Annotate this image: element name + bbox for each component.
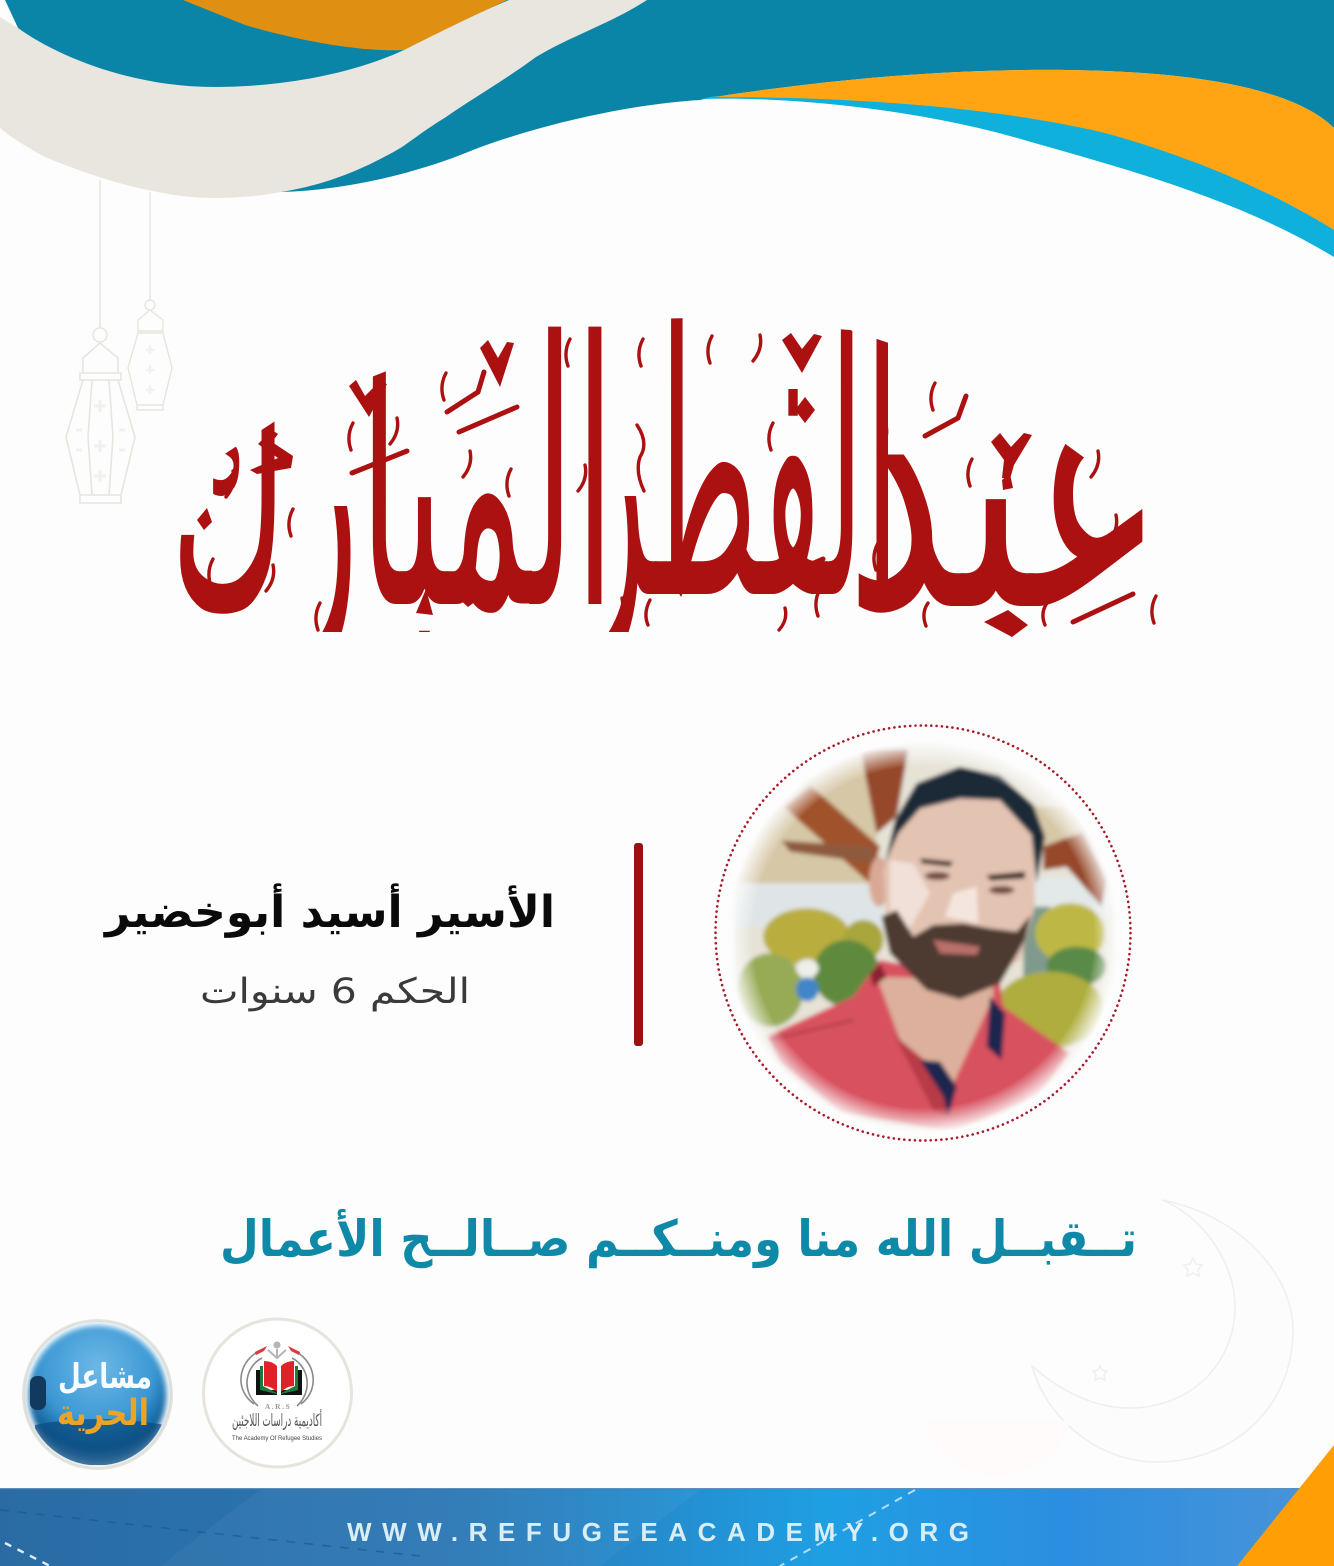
- logo: Academy of Refugee Studies: أكاديمية دراسات اللاجئين: [232, 1409, 322, 1431]
- logo: Academy of Refugee Studies: [204, 1319, 352, 1467]
- calligraphy ornaments: dashes: [200, 372, 1133, 622]
- calligraphy ornaments: hooks: [209, 335, 1156, 630]
- logo: Academy of Refugee Studies: A.R.S: [265, 1402, 291, 1411]
- photo: [733, 740, 1117, 1140]
- logo: Masha'el Al-Hurriya: الحرية: [57, 1393, 149, 1434]
- dark orange wave: [183, 0, 507, 50]
- calligraphy title: [180, 318, 1158, 637]
- top wave banner: [0, 0, 1334, 257]
- beige ribbon: [0, 0, 647, 198]
- lantern: large: [66, 180, 135, 503]
- sentence: الحكم 6 سنوات: [200, 972, 470, 1012]
- greeting line: تــقبــل الله منا ومنــكــم صــالــح الأعمال: [220, 1208, 1137, 1269]
- crescent moon watermark: [1032, 1200, 1293, 1462]
- logo: Academy of Refugee Studies: The Academy Of Refugee Studies: [232, 1436, 322, 1442]
- prisoner name: الأسير أسيد أبوخضير: [103, 883, 555, 938]
- logo: Masha'el Al-Hurriya: مشاعل: [58, 1357, 152, 1397]
- logo: Masha'el Al-Hurriya: [24, 1320, 172, 1468]
- portrait: dotted ring and photo: [716, 726, 1130, 1140]
- website address: WWW.REFUGEEACADEMY.ORG: [347, 1517, 969, 1547]
- orange corner: [1237, 1445, 1334, 1566]
- calligraphic words: المبارك: [170, 266, 615, 695]
- logo wreath arcs: [241, 1350, 313, 1406]
- footer bar: [0, 1445, 1334, 1566]
- calligraphic words: [180, 318, 1142, 632]
- vertical divider: [634, 843, 643, 1046]
- faint pink half circle: [925, 1421, 1070, 1475]
- orange wave: [715, 70, 1334, 230]
- light blue wave: [700, 90, 1334, 257]
- dotted ring: [716, 726, 1130, 1140]
- logo book: [256, 1370, 302, 1395]
- lantern: small: [128, 192, 172, 410]
- teal wave: [5, 0, 1334, 192]
- calligraphy ornaments: diamonds and v marks: [197, 333, 1032, 637]
